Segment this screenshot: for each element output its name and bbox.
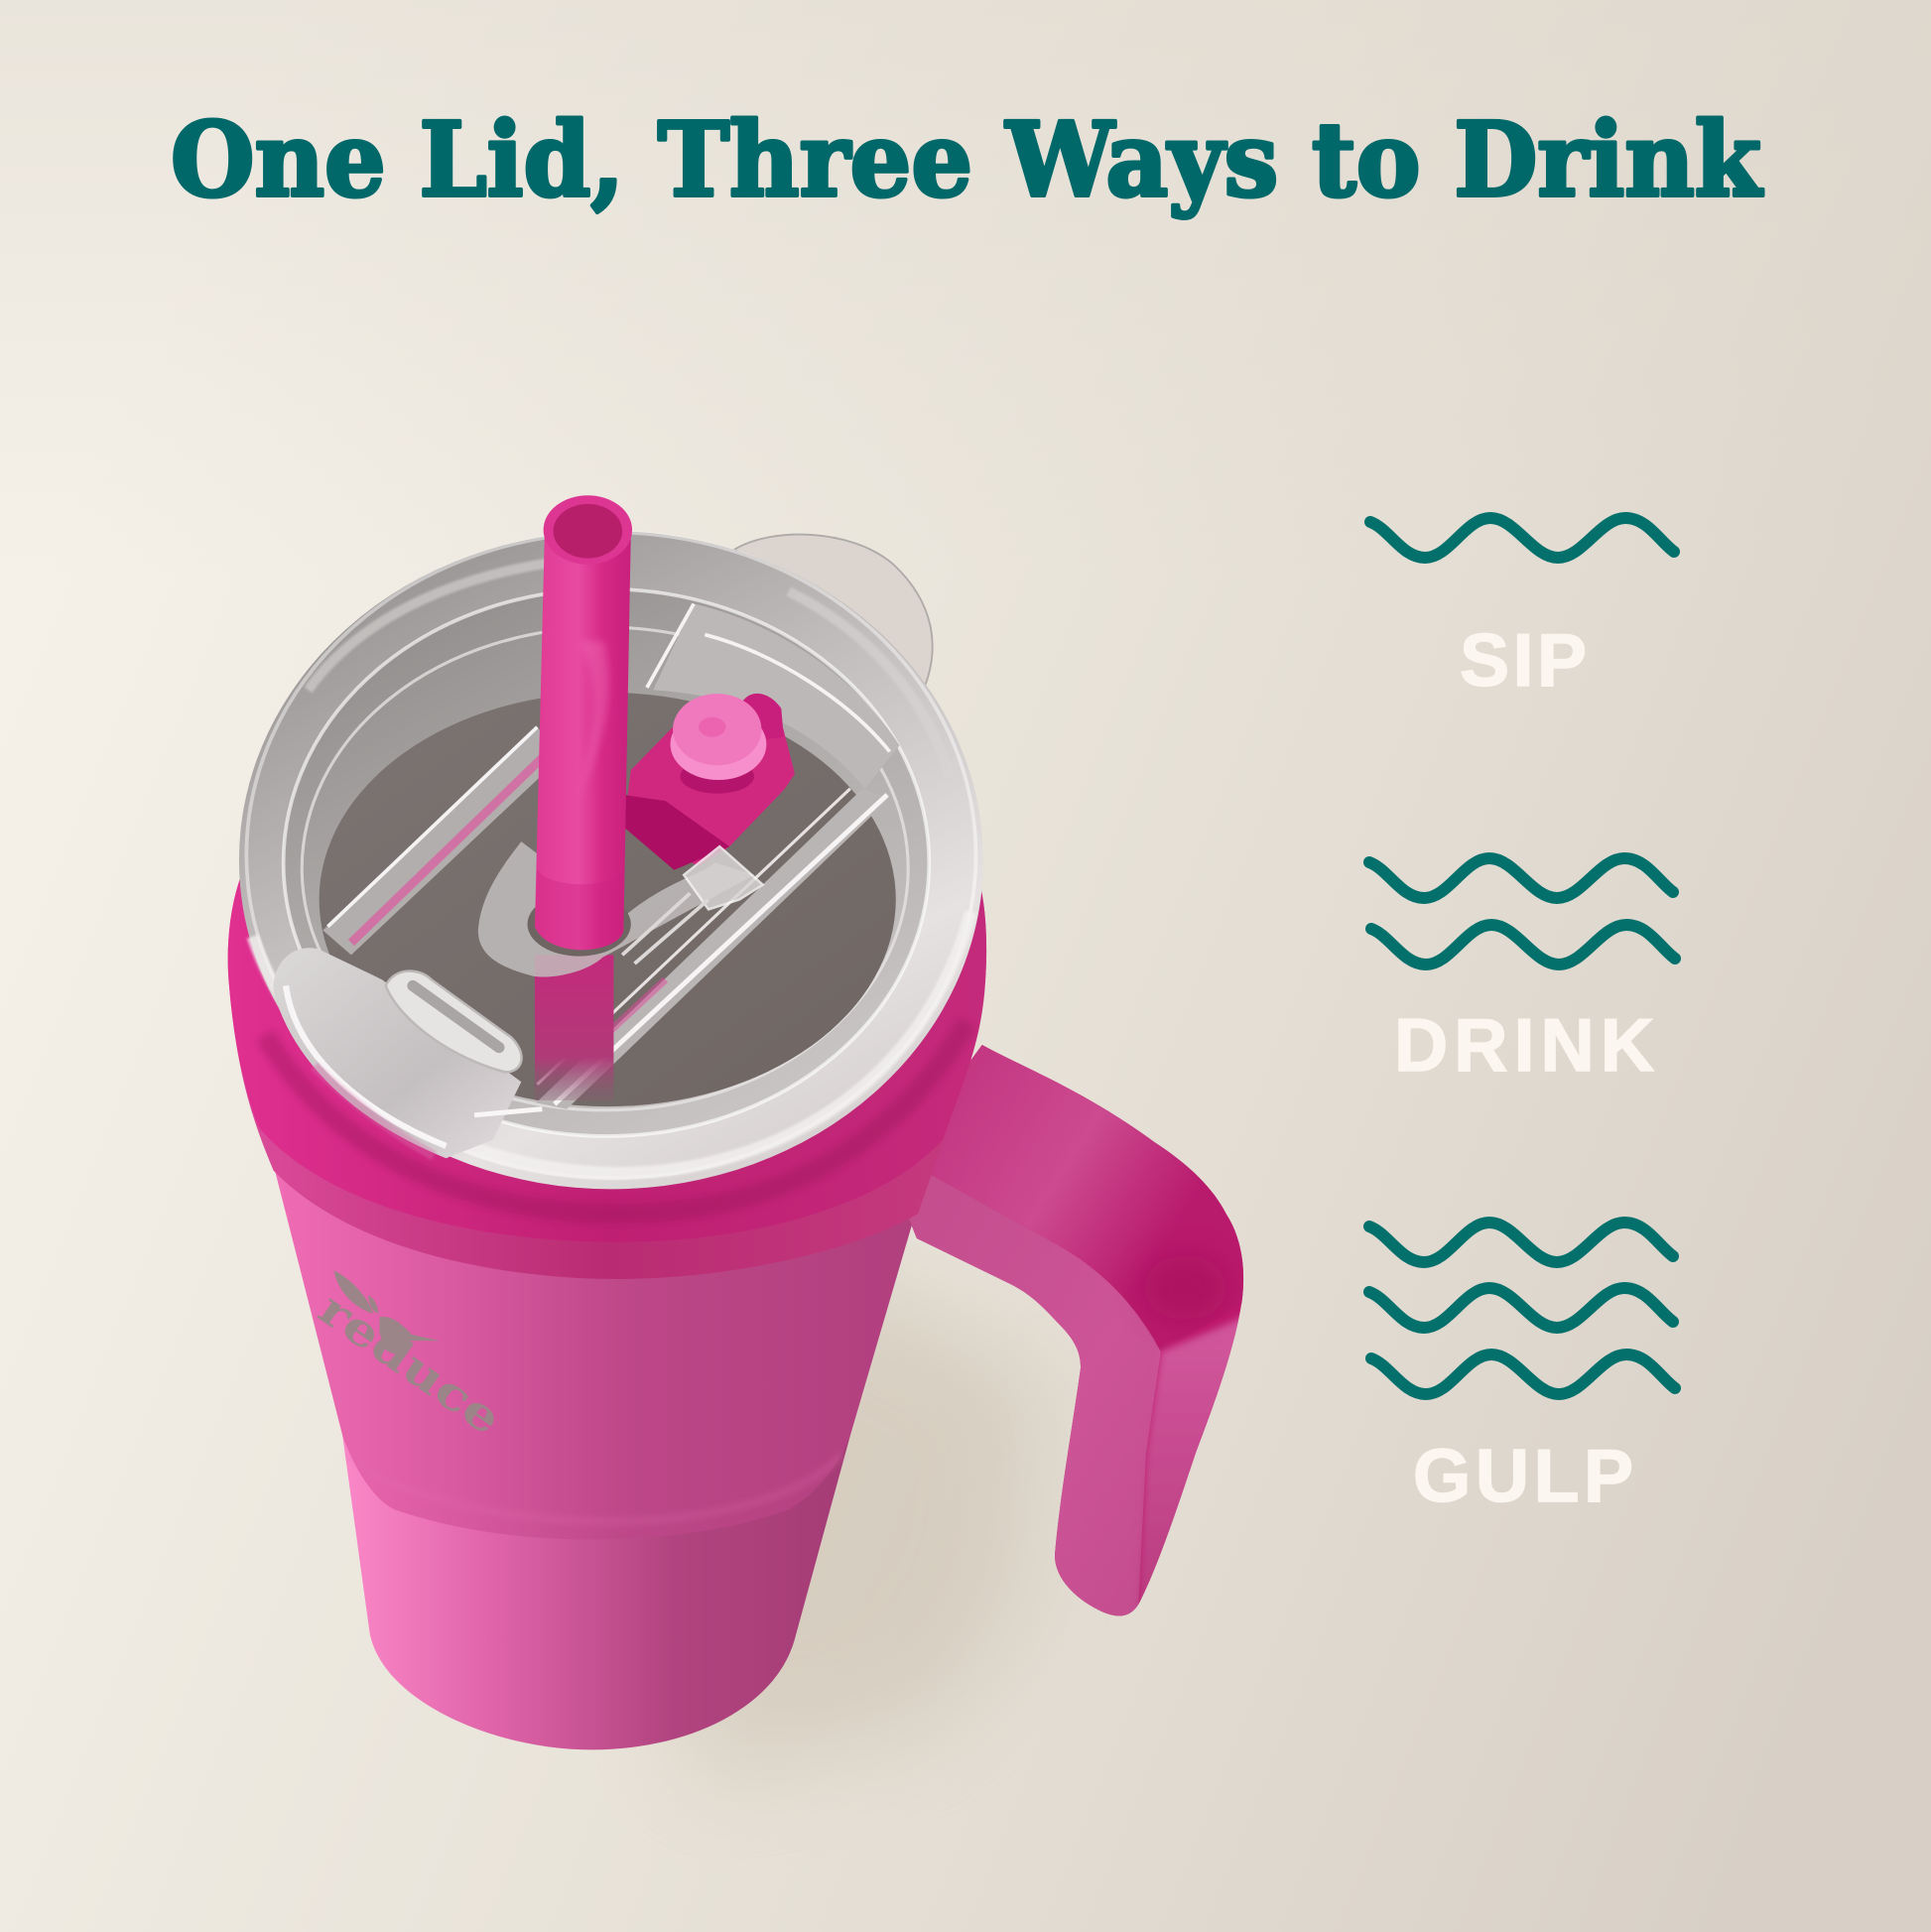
lower body [342, 1436, 850, 1749]
triple wave icon [1369, 1223, 1675, 1394]
straw slot [478, 841, 754, 977]
body step highlight [347, 1454, 842, 1521]
cast shadow [666, 1244, 1048, 1787]
drink indicator [1369, 858, 1675, 1087]
double wave icon [1369, 858, 1675, 965]
gulp label: GULP [1413, 1434, 1633, 1517]
collar lid shadow [265, 1023, 967, 1214]
handle inner face [909, 1175, 1161, 1615]
collar [228, 862, 986, 1279]
handle top face [931, 1045, 1244, 1304]
stopper base [623, 694, 795, 870]
logo bird [379, 1317, 440, 1353]
stopper pull [742, 694, 784, 739]
sip indicator [1370, 518, 1674, 702]
collar ledge [228, 862, 986, 1242]
upper body [269, 1146, 924, 1540]
stopper plug [680, 759, 754, 794]
left channel [322, 727, 567, 955]
handle dark highlight [1152, 1262, 1219, 1314]
lid tab [734, 535, 933, 694]
handle outer face [1138, 1315, 1239, 1605]
tumbler body [269, 1146, 924, 1749]
slide latch [684, 846, 763, 909]
lid inner well [284, 589, 929, 1136]
logo wordmark: reduce [310, 1282, 511, 1445]
drink label: DRINK [1394, 1003, 1654, 1087]
brand logo [310, 1270, 511, 1445]
sip flap [273, 948, 522, 1158]
right channel [536, 789, 890, 1109]
tumbler illustration [228, 495, 1269, 1787]
dark steel plate [320, 693, 896, 1106]
sip label: SIP [1460, 618, 1587, 702]
single wave icon [1370, 518, 1674, 558]
handle [909, 1045, 1244, 1615]
lower rim shine [474, 1109, 542, 1115]
gulp indicator [1369, 1223, 1675, 1517]
lid outer rim [239, 531, 983, 1189]
straw [535, 495, 632, 950]
lid rim highlights [246, 532, 976, 1178]
upper-right clear band [653, 603, 900, 789]
drink opening [386, 971, 522, 1072]
title: One Lid, Three Ways to Drink [171, 100, 1763, 220]
straw reflection [535, 955, 613, 1100]
logo leaf [334, 1270, 378, 1314]
clear lid [239, 495, 983, 1189]
